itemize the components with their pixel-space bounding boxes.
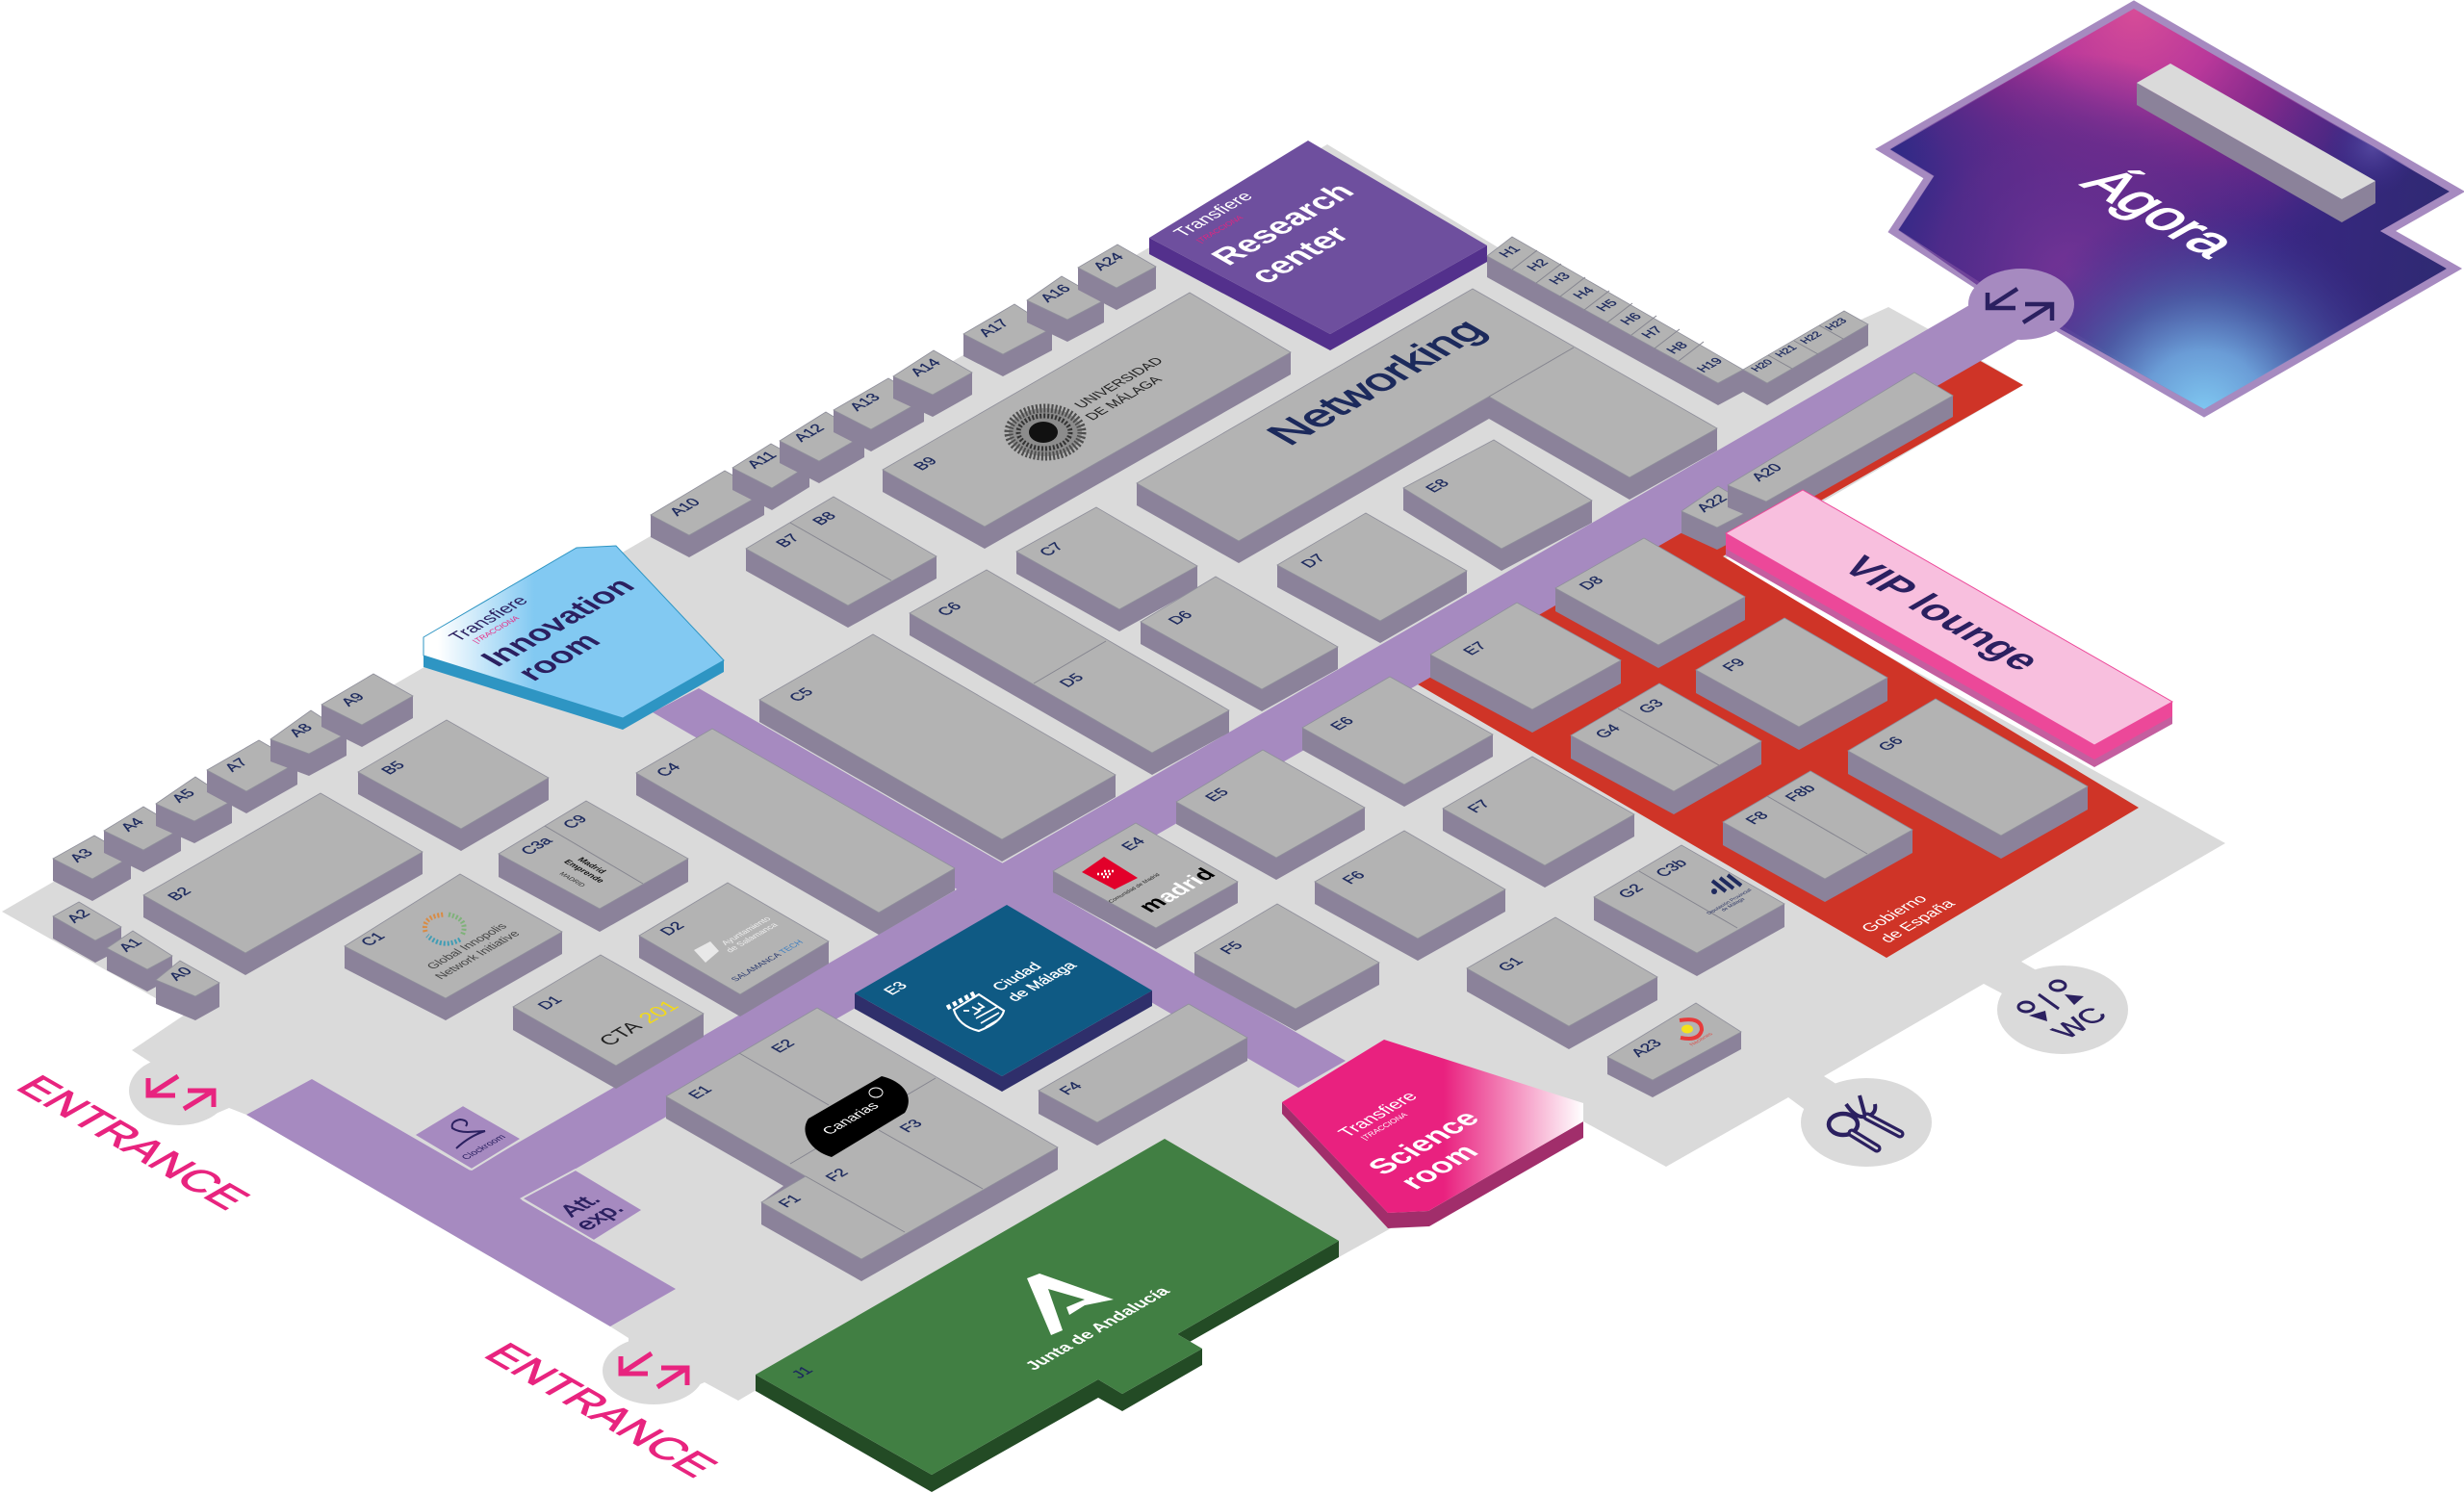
Ágora stage	[2137, 64, 2375, 222]
zone: Gobierno de España: de España	[1876, 897, 1960, 945]
stand A8	[270, 710, 346, 776]
panel: Innovation room: |TRACCIONA	[470, 614, 522, 645]
stand B5	[358, 720, 549, 851]
stand A5	[156, 777, 232, 843]
arrows: entrance 1	[148, 1076, 214, 1109]
stand E1 E2 F1 F2 F3: Canarias: F2	[823, 1167, 853, 1184]
stand D6: D6	[1166, 609, 1196, 627]
stand A9	[321, 674, 413, 747]
stand A3	[53, 836, 131, 901]
stand B9: Universidad de Málaga: UNIVERSIDAD	[1071, 355, 1168, 411]
stand G6: G6	[1875, 734, 1908, 754]
stand C6 and D5: D5	[1057, 672, 1088, 689]
stand A10: A10	[666, 497, 705, 518]
stand F9: F9	[1720, 656, 1750, 674]
corridor: cross aisle	[653, 688, 1346, 1088]
stand A10	[651, 471, 764, 557]
stand F9	[1696, 618, 1887, 750]
stand F6	[1315, 831, 1505, 961]
stand C3a and C9: Madrid Emprende	[499, 801, 688, 932]
stand E4: Comunidad de Madrid: Comunidad de Madrid	[1108, 873, 1162, 904]
zone: Gobierno de España	[1418, 359, 2139, 958]
panel: Innovation room	[424, 546, 724, 730]
panel: J1 Junta de Andalucía: J1	[788, 1364, 817, 1380]
stand A17: A17	[975, 318, 1014, 339]
stand A17	[963, 304, 1052, 376]
stand G1: G1	[1495, 955, 1527, 974]
panel: Science room: |TRACCIONA	[1358, 1111, 1410, 1142]
stand F8 and F8b: F8	[1743, 810, 1773, 827]
Junta logo	[1027, 1274, 1114, 1335]
stand A4: A4	[117, 816, 148, 834]
stand D8	[1555, 538, 1745, 668]
clockroom: Clockroom	[460, 1133, 508, 1162]
stand G2 and C3b: Diputación de Málaga: de Málaga	[1720, 897, 1748, 913]
panel: Science room: room	[1392, 1140, 1486, 1194]
stand C4: C4	[654, 761, 684, 779]
stand A1	[107, 931, 172, 991]
panel: E3 Ciudad de Málaga: Ciudad	[989, 961, 1045, 993]
stand E4: Comunidad de Madrid	[1053, 823, 1238, 949]
attendee experience	[522, 1170, 643, 1241]
stand F5	[1194, 904, 1379, 1031]
stand C3a and C9: Madrid Emprende: Emprende	[562, 859, 606, 884]
zone: Gobierno de España: Gobierno	[1858, 892, 1931, 935]
stand A22	[1681, 486, 1755, 550]
stand G2 and C3b: Diputación de Málaga: C3b	[1653, 857, 1691, 880]
stand A9: A9	[338, 691, 369, 708]
shield logo	[947, 992, 1004, 1031]
stand F4	[1039, 1004, 1247, 1145]
stand G4 and G3: G3	[1635, 697, 1668, 716]
stand H row: H20 to H23: H21	[1773, 344, 1800, 359]
stand F6: F6	[1340, 869, 1370, 887]
stand A4	[104, 807, 181, 872]
stand D1: CTA	[513, 955, 704, 1089]
stand B7 and B8: B8	[809, 510, 840, 528]
stand C1: Global Innopolis: Global Innopolis	[424, 921, 510, 971]
panel: J1 Junta de Andalucía	[756, 1139, 1339, 1492]
panel: VIP lounge	[1726, 490, 2172, 767]
stand C5: C5	[786, 686, 817, 704]
stand C1: Global Innopolis: Network Initiative	[432, 929, 523, 981]
stand A20	[1728, 373, 1953, 524]
stand: Networking	[1137, 289, 1717, 563]
stand C3a and C9: Madrid Emprende: MADRID	[557, 871, 586, 888]
stand D1: CTA: CTA	[595, 1018, 647, 1049]
circle: entrance 2	[603, 1337, 705, 1404]
stand B2	[143, 793, 423, 975]
stand F5: F5	[1218, 940, 1247, 957]
panel: E3 Ciudad de Málaga	[855, 905, 1152, 1092]
stand G2 and C3b: Diputación de Málaga: Diputación Provincial	[1706, 888, 1754, 915]
stand H row: H1 to H19: H4	[1569, 284, 1598, 300]
stand A11: A11	[744, 450, 781, 471]
label: entrance 2: ENTRANCE	[474, 1337, 728, 1483]
stand E4: Comunidad de Madrid: E4	[1118, 836, 1149, 853]
stand A12: A12	[790, 423, 829, 444]
circle: Ágora access with arrows	[1968, 269, 2074, 340]
stand E1 E2 F1 F2 F3: Canarias: F3	[897, 1118, 927, 1135]
stand A3: A3	[66, 847, 97, 864]
arrows: entrance 2	[621, 1353, 687, 1387]
stand: Networking: Networking	[1257, 313, 1496, 451]
Canarias logo: Canarias	[819, 1100, 883, 1137]
panel: J1 Junta de Andalucía: Junta de Andalucía	[1020, 1283, 1175, 1373]
panel: Research center: Research	[1203, 178, 1363, 270]
stand H row: H1 to H19: H19	[1693, 355, 1726, 374]
panel: Innovation room: Innovation	[473, 573, 642, 671]
stand E5: E5	[1202, 786, 1233, 804]
stand D2: Ayuntamiento de Salamanca	[639, 883, 829, 1017]
corridor: left entrance hall	[246, 1079, 676, 1326]
stand A12	[780, 412, 864, 483]
stand G1	[1467, 917, 1657, 1049]
Canarias logo	[805, 1076, 909, 1157]
stand A0	[156, 961, 219, 1020]
stand G4 and G3	[1571, 683, 1761, 814]
stand D1: CTA: D1	[535, 994, 566, 1012]
stand A8: A8	[286, 722, 317, 739]
stand H row: H20 to H23: H23	[1823, 317, 1850, 332]
stand H row: H1 to H19	[1487, 237, 1868, 405]
stand D1: CTA: 201	[632, 997, 684, 1026]
Ágora title: Ágora	[2068, 160, 2251, 266]
circle: restaurant	[1801, 1078, 1932, 1167]
panel: E3 Ciudad de Málaga: E3	[881, 980, 911, 997]
stand A2	[53, 902, 121, 963]
stand A0: A0	[166, 965, 196, 983]
stand C6 and D5: C6	[935, 601, 965, 618]
stand E7: E7	[1460, 640, 1491, 657]
stand B7 and B8	[746, 497, 937, 628]
attendee experience: Att.	[554, 1190, 606, 1221]
icon: WC	[2018, 981, 2115, 1043]
stand A23: Naciones: Naciones	[1689, 1032, 1714, 1047]
stand B9: Universidad de Málaga: B9	[911, 455, 941, 473]
stand F7: F7	[1465, 798, 1495, 815]
stand C5	[759, 634, 1116, 862]
stand G2 and C3b: Diputación de Málaga: G2	[1615, 882, 1648, 901]
stand D2: Ayuntamiento de Salamanca: D2	[657, 920, 688, 938]
stand E8	[1403, 440, 1592, 571]
panel: Research center	[1149, 141, 1487, 350]
stand E8: E8	[1423, 477, 1453, 495]
stand D7: D7	[1298, 553, 1329, 570]
stand C6 and D5	[910, 570, 1229, 775]
stand C1: Global Innopolis	[345, 874, 562, 1020]
stand C1: Global Innopolis: C1	[358, 931, 389, 948]
stand A14	[893, 350, 972, 417]
exhibition floor	[2, 144, 2225, 1425]
circle: WC	[1997, 965, 2128, 1054]
stand A1: A1	[116, 937, 146, 954]
stand H row: H1 to H19: H8	[1662, 339, 1691, 355]
panel: Research center: center	[1241, 221, 1358, 289]
stand E1 E2 F1 F2 F3: Canarias: E1	[685, 1084, 716, 1101]
panel: Innovation room: Transfiere	[445, 594, 533, 644]
stand D2: Ayuntamiento de Salamanca: Ayuntamiento	[719, 915, 773, 946]
stand A7: A7	[221, 757, 252, 774]
stand G6	[1848, 699, 2088, 859]
panel: VIP lounge: VIP lounge	[1833, 550, 2052, 677]
stand C3a and C9: Madrid Emprende: C9	[560, 813, 591, 831]
stand D7	[1277, 513, 1467, 643]
panel: E3 Ciudad de Málaga: de Málaga	[1004, 960, 1081, 1004]
panel: Science room: Science	[1360, 1106, 1487, 1179]
stand E1 E2 F1 F2 F3: Canarias: F1	[776, 1193, 806, 1210]
panel: Ágora	[1883, 5, 2457, 413]
circle: entrance 1	[129, 1056, 229, 1125]
stand E6: E6	[1327, 715, 1358, 733]
stand F7	[1443, 757, 1634, 888]
stand B5: B5	[378, 759, 409, 777]
stand A11	[732, 444, 809, 510]
stand C3a and C9: Madrid Emprende: Madrid	[576, 856, 608, 875]
panel: Research center: |TRACCIONA	[1194, 214, 1245, 245]
stand B7 and B8: B7	[773, 532, 804, 550]
stand A13: A13	[846, 392, 885, 413]
stand C7	[1016, 507, 1197, 631]
attendee experience: exp.	[570, 1199, 629, 1234]
stand E5	[1176, 750, 1365, 880]
stand E7	[1430, 603, 1621, 733]
stand A2: A2	[64, 908, 94, 925]
stand H row: H20 to H23	[1743, 311, 1868, 383]
stand A24	[1078, 245, 1156, 310]
stand A14: A14	[907, 357, 945, 378]
panel: Science room	[1282, 1040, 1583, 1228]
stand D6	[1141, 577, 1338, 711]
stand A16	[1027, 276, 1104, 342]
stand A24: A24	[1090, 251, 1128, 272]
stand H row: H1 to H19: H2	[1523, 256, 1552, 272]
stand E4: Comunidad de Madrid: madrid	[1133, 864, 1221, 916]
stand D2: Ayuntamiento de Salamanca: de Salamanca	[724, 921, 780, 954]
stand A23: Naciones	[1607, 1003, 1741, 1097]
stand C3a and C9: Madrid Emprende: C3a	[518, 835, 556, 858]
icon: WC: WC	[2045, 1003, 2115, 1043]
icon: restaurant	[1829, 1095, 1900, 1148]
panel: Science room: Transfiere	[1334, 1090, 1423, 1140]
stand G2 and C3b: Diputación de Málaga	[1594, 845, 1784, 976]
stand C4	[636, 729, 955, 935]
stand A22: A22	[1693, 493, 1732, 514]
stand E1 E2 F1 F2 F3: Canarias	[666, 1008, 1058, 1281]
stand B9: Universidad de Málaga	[883, 293, 1291, 549]
stand H row: H1 to H19: H7	[1637, 323, 1666, 340]
panel: Innovation room: room	[508, 628, 608, 685]
stand H row: H1 to H19: H5	[1592, 296, 1621, 313]
stand E1 E2 F1 F2 F3: Canarias: E2	[768, 1038, 799, 1055]
stand F8 and F8b	[1723, 771, 1912, 902]
stand H row: H1 to H19: H3	[1545, 270, 1574, 286]
stand G4 and G3: G4	[1592, 722, 1625, 741]
panel: Research center: Transfiere	[1169, 190, 1258, 240]
stand F4: F4	[1057, 1080, 1087, 1097]
stand A23: Naciones: A23	[1628, 1038, 1666, 1059]
stand H row: H20 to H23: H20	[1749, 358, 1776, 373]
stand D8: D8	[1577, 575, 1607, 592]
stand A16: A16	[1037, 283, 1075, 304]
corridor: main diagonal	[470, 297, 2031, 1200]
clockroom	[414, 1105, 522, 1170]
stand H row: H20 to H23: H22	[1798, 330, 1825, 346]
stand B2: B2	[165, 886, 195, 903]
label: entrance 1: ENTRANCE	[6, 1069, 260, 1216]
stand A13	[834, 378, 924, 451]
stand F8 and F8b: F8b	[1783, 783, 1819, 804]
stand A20: A20	[1748, 462, 1786, 483]
stand E6	[1302, 677, 1493, 807]
stand H row: H1 to H19: H1	[1495, 243, 1524, 259]
stand D2: Ayuntamiento de Salamanca: SALAMANCA TECH	[729, 939, 806, 983]
stand A5: A5	[168, 787, 199, 805]
stand B9: Universidad de Málaga: DE MÁLAGA	[1082, 373, 1167, 423]
stand A7	[207, 740, 297, 813]
stand H row: H1 to H19: H6	[1616, 310, 1645, 326]
stand C7: C7	[1037, 541, 1067, 558]
